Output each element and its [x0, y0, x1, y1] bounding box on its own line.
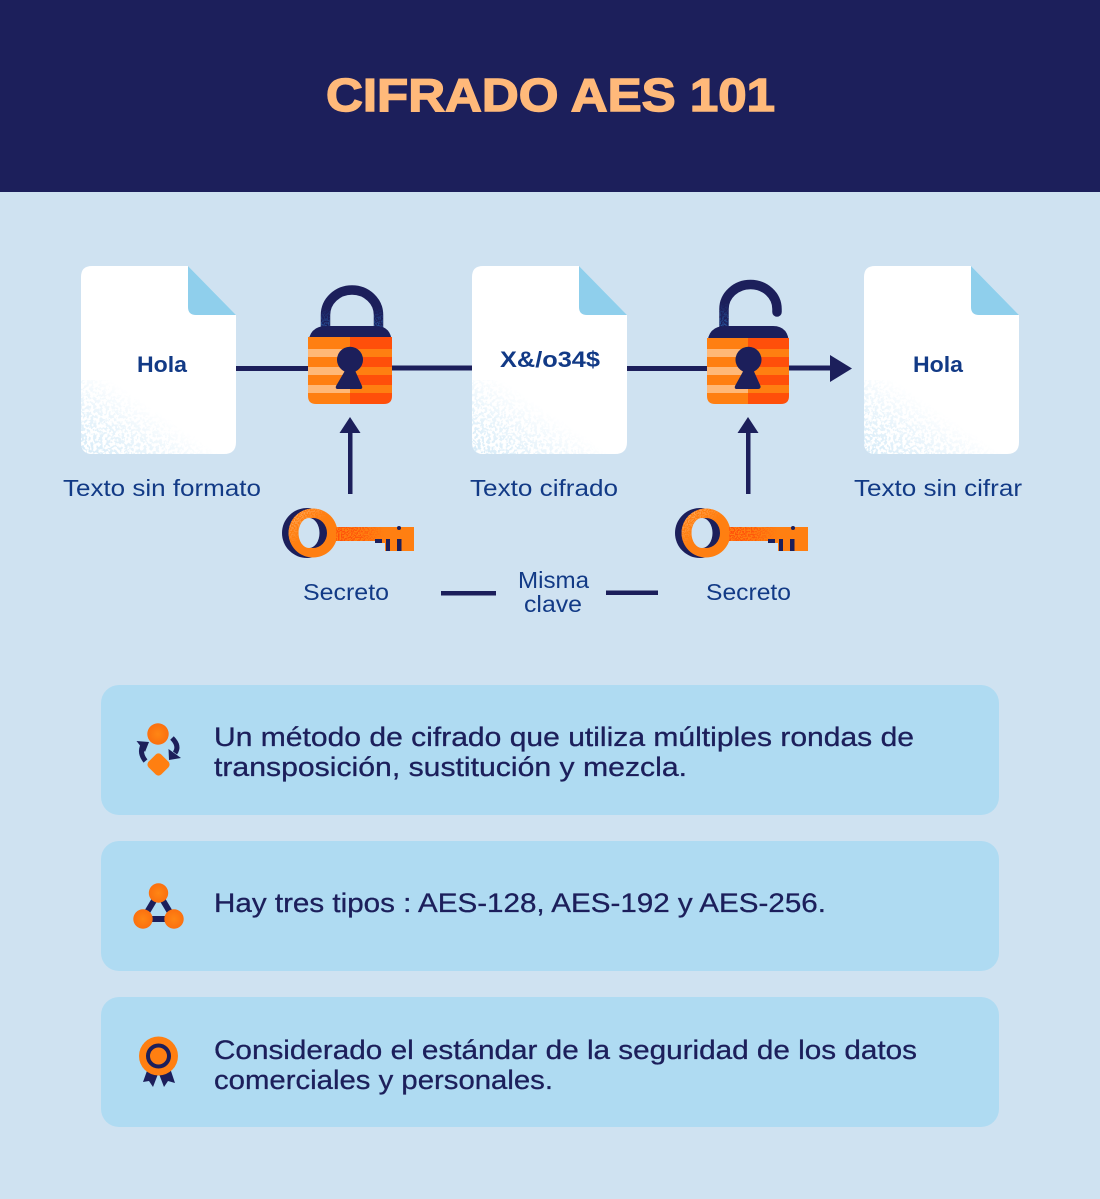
icon: closed padlock [308, 290, 392, 404]
label: Hola: Hola [137, 352, 188, 377]
text: cipher method [214, 722, 914, 782]
icon: open padlock [707, 284, 789, 404]
panel: cipher method [101, 685, 999, 815]
icon: connected nodes [133, 883, 184, 929]
icon: key left [282, 508, 414, 558]
caption: Misma clave: Misma [518, 567, 589, 593]
text: cipher method: transposición, sustitución y mezcla. [214, 752, 687, 782]
caption: Misma clave: clave [524, 591, 582, 617]
icon: award rosette [139, 1036, 178, 1087]
caption: Texto sin cifrar: Texto sin cifrar [854, 475, 1022, 501]
text: three types: Hay tres tipos : AES-128, AES-192 y AES-256. [214, 888, 826, 918]
caption: Secreto left: Secreto [303, 579, 389, 605]
text: cipher method: Un método de cifrado que utiliza múltiples rondas de [214, 722, 914, 752]
label: X&/o34$: X&/o34$ [500, 347, 600, 372]
caption: Texto cifrado: Texto cifrado [470, 475, 618, 501]
icon: key right [675, 508, 808, 558]
panel: three types [101, 841, 999, 971]
label: Hola: Hola [913, 352, 964, 377]
text: standard: Considerado el estándar de la seguridad de los datos [214, 1035, 917, 1065]
dash left of Misma clave [441, 591, 496, 596]
caption: Misma clave [518, 567, 589, 617]
text: standard [214, 1035, 917, 1095]
header band [0, 0, 1100, 192]
caption: Secreto right: Secreto [706, 579, 791, 605]
caption: Texto sin formato: Texto sin formato [63, 475, 261, 501]
arrow: key to closed lock [340, 417, 360, 494]
panel: standard [101, 997, 999, 1127]
dash right of Misma clave [606, 590, 658, 595]
text: standard: comerciales y personales. [214, 1065, 553, 1095]
document: decrypted text [864, 266, 1019, 454]
arrow: output head [830, 355, 852, 382]
connector lines [236, 366, 832, 371]
title: CIFRADO AES 101 [326, 69, 775, 121]
document: plain text [81, 266, 236, 454]
arrow: key to open lock [738, 417, 758, 494]
icon: rounds cycle [136, 723, 181, 777]
document: cipher text [472, 266, 627, 454]
